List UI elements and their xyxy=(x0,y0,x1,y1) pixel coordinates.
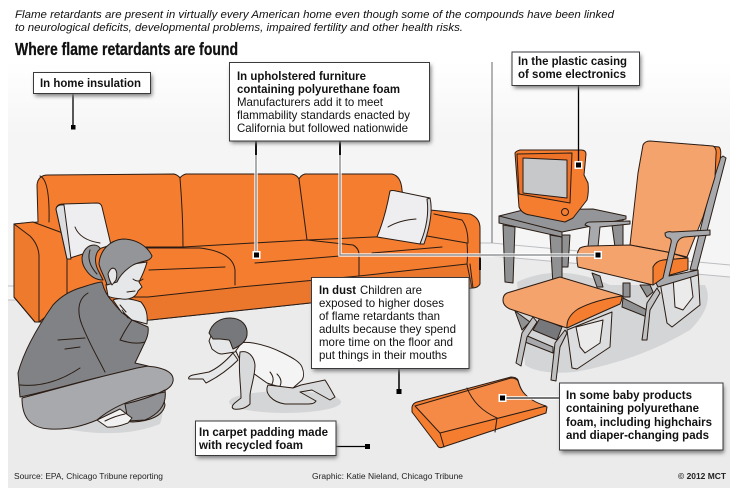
back cushion side xyxy=(680,145,721,257)
back frame xyxy=(690,156,726,270)
callout: dust: In dust xyxy=(319,283,356,297)
ottoman xyxy=(503,277,622,381)
head xyxy=(209,330,240,354)
hand xyxy=(113,299,147,324)
callout: baby products: containing polyurethane xyxy=(566,401,699,415)
woman xyxy=(18,239,173,429)
sweater xyxy=(18,282,148,397)
connector: dust xyxy=(396,368,402,394)
ponytail xyxy=(82,245,103,280)
intro text: Flame retardants are present in virtually every American home even though some of the compounds have been linked xyxy=(15,9,615,21)
callout: carpet padding: with recycled foam xyxy=(198,438,303,452)
floor shadows xyxy=(60,273,708,433)
callout: carpet padding xyxy=(196,421,337,458)
television on side table xyxy=(499,150,626,285)
callout: electronics: of some electronics xyxy=(518,67,626,81)
seat xyxy=(577,245,688,285)
changing pad xyxy=(412,377,547,448)
arm xyxy=(189,353,238,383)
title: Where flame retardants are found xyxy=(15,39,238,59)
connector lines xyxy=(71,85,602,449)
back cushion xyxy=(630,141,716,257)
pillow left xyxy=(56,203,111,259)
callout: upholstered furniture: In upholstered furniture xyxy=(237,69,366,83)
face and neck xyxy=(106,262,147,299)
callout: baby products: and diaper-changing pads xyxy=(566,428,709,442)
baby xyxy=(189,318,335,409)
callout: home insulation xyxy=(34,72,152,96)
near arm xyxy=(232,352,255,409)
body xyxy=(233,342,304,388)
callout: upholstered furniture: Manufacturers add it to meet xyxy=(237,95,384,109)
callout: dust: more time on the floor and xyxy=(319,335,453,349)
callout: upholstered furniture: containing polyurethane foam xyxy=(237,82,400,96)
callout: dust: adults because they spend xyxy=(319,322,456,336)
callout: dust: Children are xyxy=(360,283,422,297)
connector: electronics xyxy=(574,85,582,169)
callout: upholstered furniture: flammability standards enacted by xyxy=(237,108,410,122)
connector: carpet xyxy=(336,444,370,449)
ear xyxy=(108,268,117,285)
source note: Source: EPA, Chicago Tribune reporting xyxy=(14,471,163,481)
graphic credit: Graphic: Katie Nieland, Chicago Tribune xyxy=(312,471,463,481)
callout: baby products xyxy=(560,383,724,453)
rear legs and bar xyxy=(592,273,653,317)
connector: upholstered furniture xyxy=(256,141,598,255)
front leg xyxy=(642,288,660,340)
callout: dust xyxy=(312,278,470,371)
pillow right xyxy=(377,190,430,244)
copyright: © 2012 MCT xyxy=(678,471,727,481)
callout: carpet padding: In carpet padding made xyxy=(199,425,328,439)
tv screen xyxy=(523,158,567,198)
callout: home insulation: In home insulation xyxy=(40,76,141,90)
sofa xyxy=(14,174,480,322)
tv body xyxy=(515,150,588,222)
foot xyxy=(97,409,132,427)
far arm xyxy=(585,221,630,247)
table xyxy=(503,218,623,285)
callout: upholstered furniture: California but followed nationwide xyxy=(237,121,408,135)
leg xyxy=(267,380,335,404)
sofa left arm xyxy=(14,222,67,322)
callout: dust: exposed to higher doses xyxy=(319,296,444,310)
hair xyxy=(99,239,152,285)
tv knob xyxy=(562,208,568,216)
callout: baby products: foam, including highchairs xyxy=(566,415,712,429)
connector: baby products xyxy=(498,394,560,402)
callout: dust: of flame retardants than xyxy=(319,309,440,323)
callout: upholstered furniture xyxy=(230,62,431,143)
glider chair xyxy=(577,141,726,340)
near arm xyxy=(656,230,710,287)
callout: dust: put things in their mouths xyxy=(319,348,447,362)
callout: electronics xyxy=(512,52,641,88)
connector: insulation xyxy=(71,93,76,130)
callout: electronics: In the plastic casing xyxy=(518,54,627,68)
intro text xyxy=(15,9,615,34)
callout: baby products: In some baby products xyxy=(566,388,692,402)
base panel xyxy=(660,270,700,327)
pants xyxy=(22,365,173,429)
intro text: to neurological deficits, developmental problems, impaired fertility and other health risks. xyxy=(15,22,463,34)
